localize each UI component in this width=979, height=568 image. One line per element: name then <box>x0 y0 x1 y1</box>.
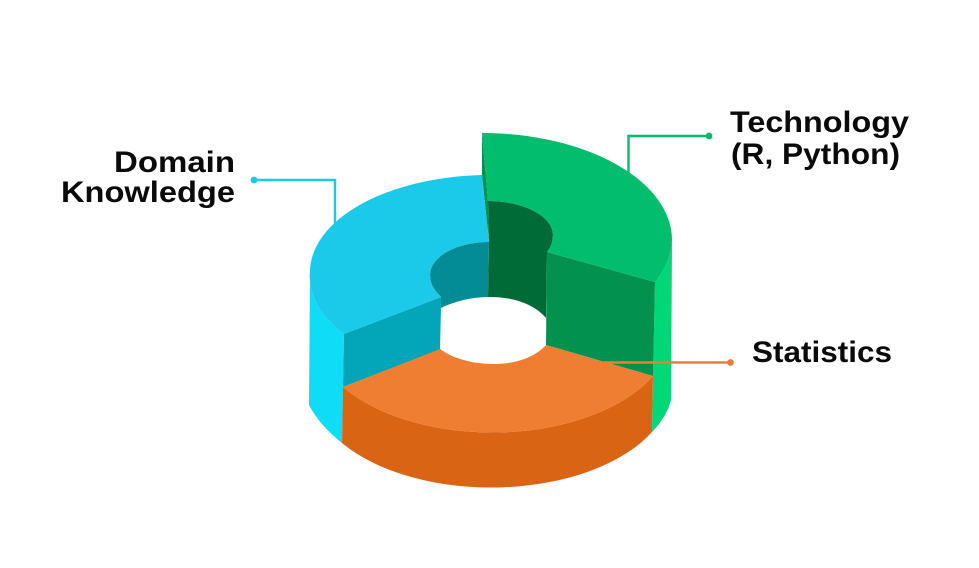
leader line: technology <box>628 133 712 173</box>
label: domain knowledge <box>61 146 235 209</box>
central hole <box>440 297 546 364</box>
label: technology: Technology <box>730 106 909 139</box>
segment: statistics outer wall <box>342 376 653 488</box>
leader line: domain knowledge <box>251 177 335 226</box>
label: technology: (R, Python) <box>731 138 900 171</box>
label: statistics: Statistics <box>752 336 892 369</box>
label: domain knowledge: Domain <box>114 146 235 179</box>
segment: technology outer wall <box>652 240 672 432</box>
leader line: statistics <box>603 359 734 366</box>
segment: technology hole wall <box>488 201 553 325</box>
label: technology <box>730 106 909 171</box>
segment: domain knowledge inner wall <box>343 297 441 387</box>
segment: technology inner wall <box>546 252 655 376</box>
segment: technology top face <box>482 133 672 282</box>
label: domain knowledge: Knowledge <box>61 176 235 209</box>
segment: statistics top face <box>343 345 653 433</box>
3D ring chart <box>309 133 672 488</box>
segment: domain knowledge hole wall <box>430 242 489 315</box>
segment: technology back sliver <box>482 133 489 242</box>
segment: domain knowledge top face <box>310 175 489 334</box>
segment: domain knowledge outer wall <box>309 272 344 443</box>
